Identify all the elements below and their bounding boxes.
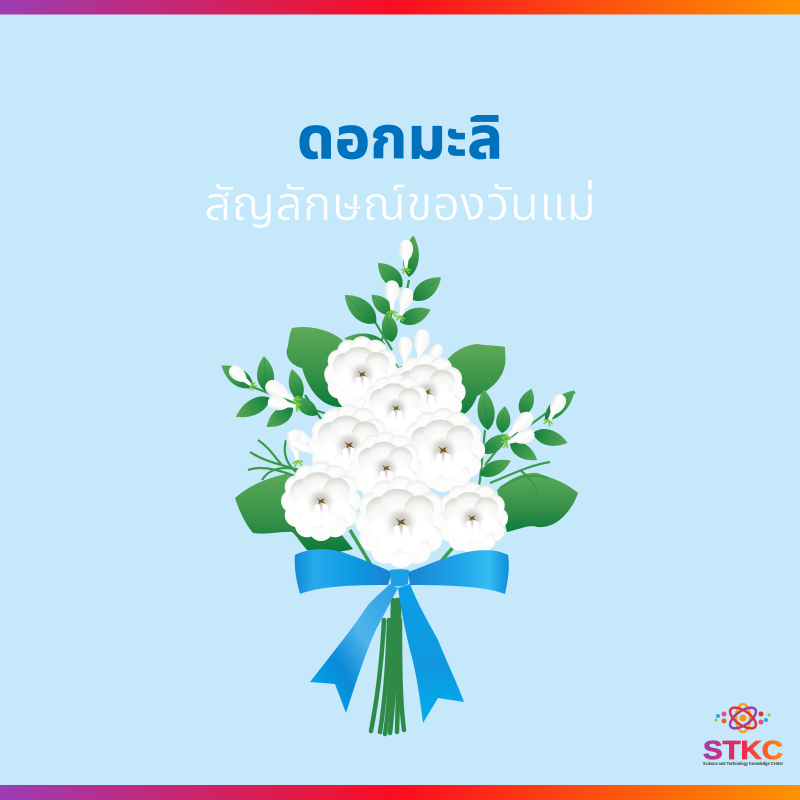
big leaves	[235, 327, 578, 552]
small leaves: top sprig	[338, 234, 446, 352]
ribbon: left loop	[295, 549, 392, 594]
blue ribbon	[295, 549, 509, 723]
logo: atom icon	[727, 704, 759, 732]
logo: coloured dots	[714, 712, 770, 724]
subtitle: สัญลักษณ์ของวันแม่	[204, 177, 596, 230]
jasmine flowers	[281, 336, 508, 568]
jasmine buds	[226, 240, 569, 467]
leaf: bottom right	[497, 473, 578, 532]
leaf: bottom left	[235, 473, 353, 552]
leaf: top left	[287, 327, 345, 407]
jasmine bouquet	[217, 234, 580, 734]
stem bundle	[371, 600, 404, 734]
ribbon: right tail	[398, 584, 464, 723]
logo: tagline: Science and Technology Knowledge Center	[703, 761, 783, 766]
ribbon: right loop	[408, 550, 509, 594]
ribbon: knot	[390, 569, 409, 586]
bottom gradient bar	[0, 785, 800, 800]
logo: wordmark: STKC	[703, 735, 783, 765]
title: ดอกมะลิ	[297, 105, 503, 171]
stems	[248, 280, 575, 580]
top gradient bar	[0, 0, 800, 14]
ribbon: left tail	[310, 584, 398, 713]
STKC logo	[703, 704, 783, 766]
small leaves: left sprig	[217, 355, 321, 433]
leaf: top right	[445, 344, 505, 416]
small leaves: right sprig	[475, 385, 580, 481]
